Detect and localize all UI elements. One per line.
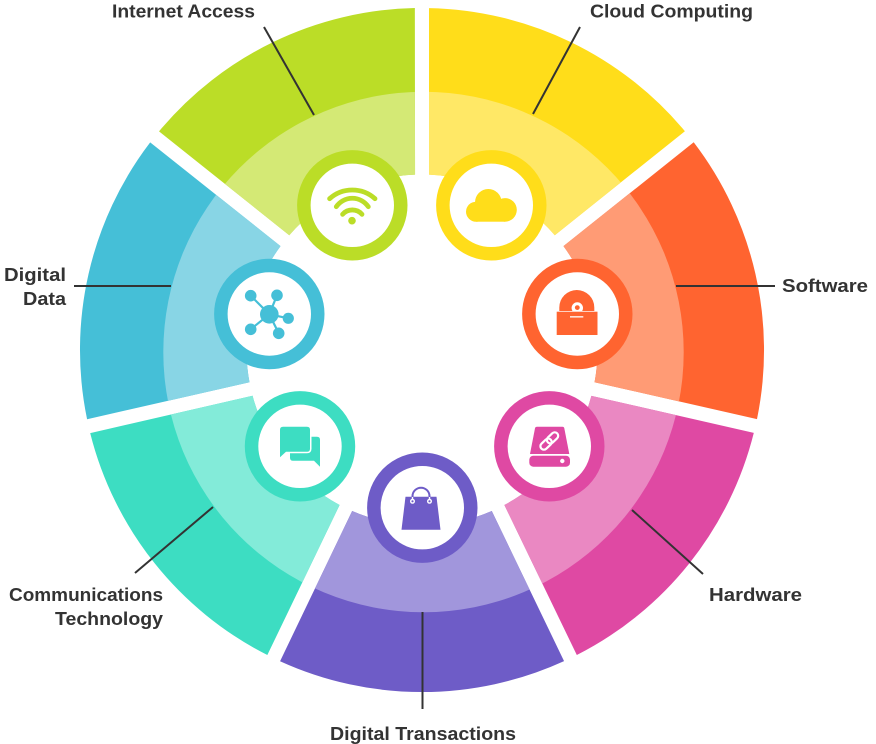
label: Hardware: Hardware: [709, 585, 802, 605]
segment: Software: [564, 142, 764, 420]
label: Communications Technology: Technology: [55, 609, 163, 629]
leader line: Internet Access: [264, 27, 314, 115]
label: Software: Software: [782, 276, 868, 296]
icon: cloud badge: [443, 157, 540, 254]
leader line: Hardware: [632, 510, 703, 574]
icon: wifi badge: [304, 157, 401, 254]
label: Digital Data: Data: [23, 289, 67, 309]
segment: Hardware: [504, 396, 754, 655]
label: Internet Access: Internet Access: [112, 2, 255, 22]
segment: Communications Technology: [90, 396, 340, 655]
leader line: Digital Transactions: [422, 612, 424, 709]
icon: lock badge: [529, 266, 626, 362]
label: Communications Technology: Communications: [9, 585, 163, 605]
label: Digital Transactions: Digital Transactions: [330, 724, 516, 744]
segment: Digital Transactions: [280, 511, 564, 692]
leader line: Digital Data: [74, 285, 171, 287]
label: Digital Data: Digital: [4, 265, 66, 285]
leader line: Software: [676, 285, 775, 287]
segment: Internet Access: [159, 8, 416, 236]
label: Communications Technology: [9, 585, 163, 629]
leader line: Cloud Computing: [533, 27, 580, 114]
icon: network badge: [221, 266, 318, 362]
segment: Digital Data: [80, 142, 280, 420]
icon: linked drive badge: [501, 398, 598, 495]
icon: shopping bag badge: [374, 459, 471, 556]
segment: Cloud Computing: [429, 8, 685, 235]
label: Cloud Computing: Cloud Computing: [590, 2, 753, 22]
leader line: Communications Technology: [135, 507, 213, 573]
label: Digital Data: [4, 265, 67, 309]
icon: chat bubbles badge: [252, 398, 348, 495]
